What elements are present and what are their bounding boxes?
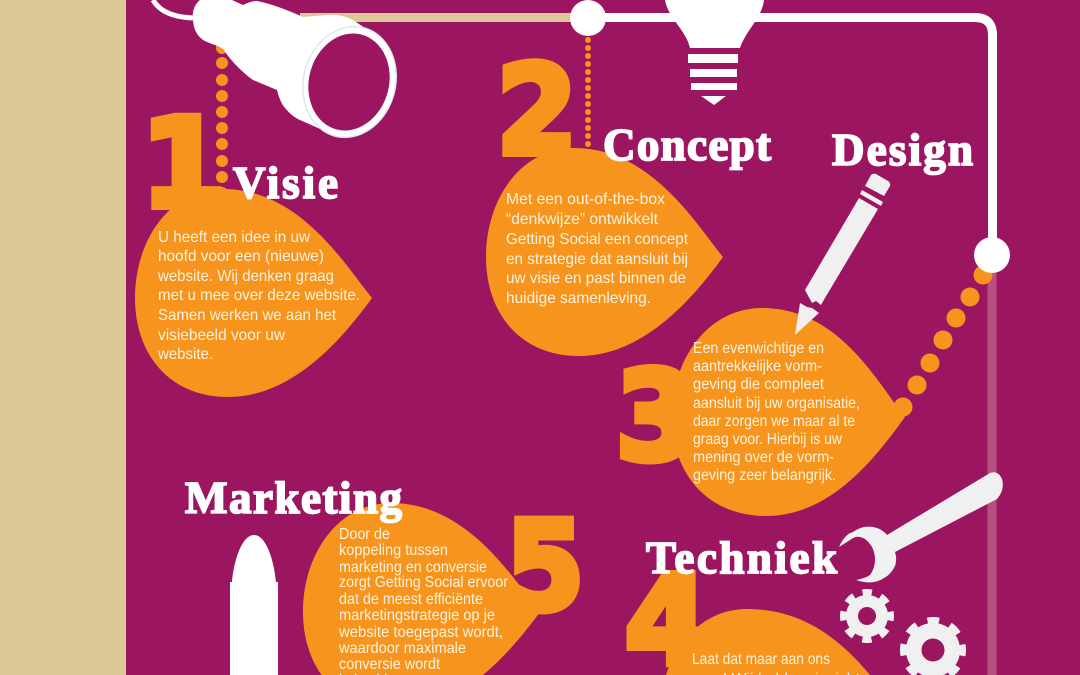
icon: spotlight [153, 0, 408, 148]
bubble 1 [135, 189, 372, 397]
heading: Techniek: Techniek [646, 533, 837, 583]
text: design: mening over de vorm- [693, 449, 834, 466]
panel: design [672, 125, 973, 516]
text: design: graag voor. Hierbij is uw [693, 431, 843, 448]
heading: Visie: Visie [233, 158, 338, 208]
bubble 3 [672, 308, 905, 516]
text: concept: “denkwijze” ontwikkelt [506, 211, 659, 228]
text: marketing: marketingstrategie op je [339, 607, 495, 624]
text: design: daar zorgen we maar al te [693, 413, 855, 430]
text: marketing: zorgt Getting Social ervoor [339, 574, 508, 591]
text: design: geving zeer belangrijk. [693, 467, 836, 484]
text: visie: hoofd voor een (nieuwe) [158, 248, 324, 265]
dotted connector 2 [585, 37, 591, 147]
heading: Concept: Concept [603, 120, 771, 170]
text: visie: met u mee over deze website. [158, 287, 360, 304]
text: marketing: dat de meest efficiënte [339, 591, 483, 608]
text: concept [506, 191, 689, 307]
heading: Design: Design [832, 125, 973, 175]
icon: large gear [904, 620, 962, 675]
text: visie: visiebeeld voor uw [158, 327, 285, 344]
text: marketing: website toegepast wordt, [338, 624, 503, 641]
text: visie: U heeft een idee in uw [158, 229, 310, 246]
dotted connector 1 [216, 42, 228, 199]
heading: Marketing: Marketing [185, 473, 402, 523]
number 5: 5 [506, 496, 584, 638]
text: concept: Getting Social een concept [506, 231, 689, 248]
number 2: 2 [497, 40, 577, 182]
text: concept: Met een out-of-the-box [506, 191, 665, 208]
panel: techniek [646, 472, 1003, 675]
text: design: geving die compleet [693, 376, 825, 393]
text: visie: website. [157, 346, 213, 363]
bubble 2 [486, 148, 723, 356]
number 1: 1 [141, 93, 226, 235]
panel: visie [135, 158, 372, 397]
text: concept: en strategie dat aansluit bij [506, 251, 688, 268]
icon: light bulb [665, 0, 764, 105]
text: visie: Samen werken we aan het [158, 307, 337, 324]
junction node top [570, 0, 606, 36]
text: marketing: marketing en conversie [339, 559, 487, 576]
text: design: Een evenwichtige en [693, 340, 824, 357]
text: design: aantrekkelijke vorm- [693, 358, 822, 375]
icon: pencil [795, 174, 890, 335]
text: concept: huidige samenleving. [506, 290, 651, 307]
text: marketing: Door de [339, 526, 390, 543]
panel: concept [486, 120, 771, 356]
text: visie [157, 229, 360, 363]
bubble 5 [303, 503, 540, 675]
icon: small gear [844, 592, 890, 640]
icon: wrench [839, 472, 1003, 582]
text: marketing: waardoor maximale [338, 640, 466, 657]
text: design: aansluit bij uw organisatie, [693, 395, 860, 412]
text: concept: uw visie en past binnen de [506, 270, 686, 287]
connecting line [300, 18, 992, 675]
text: marketing: koppeling tussen [339, 542, 448, 559]
text: visie: website. Wij denken graag [157, 268, 334, 285]
dotted connector 3 [894, 266, 992, 416]
junction node right [974, 237, 1010, 273]
bubble 4 [666, 609, 870, 675]
text: design [693, 340, 860, 484]
text: marketing [338, 526, 508, 675]
icon: rocket [230, 535, 278, 675]
text: techniek [692, 651, 861, 675]
text: marketing: conversie wordt [339, 656, 441, 673]
text: techniek: Laat dat maar aan ons [692, 651, 830, 668]
number 3: 3 [616, 346, 696, 488]
panel: marketing [185, 473, 584, 675]
